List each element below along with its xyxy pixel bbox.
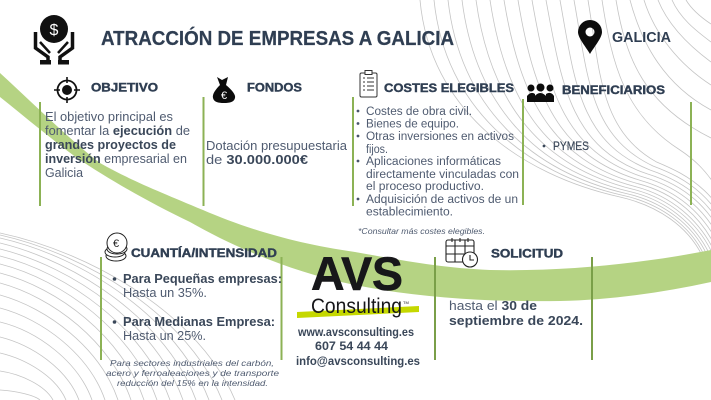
text: objetivo body: Galicia <box>45 165 84 180</box>
icon: map pin <box>578 20 602 54</box>
icon: calendar with clock <box>446 238 478 267</box>
green swoosh band <box>0 73 711 301</box>
panel: solicitud <box>446 238 583 328</box>
text: fondos body: de 30.000.000€ <box>206 152 308 167</box>
contact details: 607 54 44 44 <box>315 341 389 353</box>
text: fondos body <box>206 138 348 167</box>
logo: AVS Consulting: TM <box>403 300 409 305</box>
text: objetivo body <box>45 109 190 180</box>
heading: cuantía/intensidad: CUANTÍA/INTENSIDAD <box>131 247 277 260</box>
panel: fondos <box>206 77 348 167</box>
list: intensidades: Para Pequeñas empresas: <box>123 271 282 286</box>
list: intensidades: Hasta un 25%. <box>123 328 206 343</box>
list: costes: Adquisición de activos de un <box>366 194 518 206</box>
note: sectores: acero y ferroaleaciones y de transporte <box>106 368 279 378</box>
column dividers <box>40 97 691 360</box>
panel: cuantía/intensidad <box>105 233 282 388</box>
text: solicitud body: hasta el 30 de <box>449 298 537 313</box>
panel: costes elegibles <box>357 70 519 236</box>
title: ATRACCIÓN DE EMPRESAS A GALICIA <box>101 26 454 50</box>
list: intensidades: Para Medianas Empresa: <box>123 314 275 329</box>
list: costes: Aplicaciones informáticas <box>366 156 501 168</box>
logo: AVS Consulting: Consulting <box>311 295 402 318</box>
heading: solicitud: SOLICITUD <box>491 248 563 260</box>
list: costes <box>357 106 519 218</box>
icon: people <box>527 84 554 102</box>
list: beneficiarios: PYMES <box>553 139 589 153</box>
icon: coins: € <box>113 238 119 250</box>
panel: objetivo <box>45 77 190 180</box>
panel: beneficiarios <box>527 84 665 153</box>
list: costes: fijos. <box>366 144 388 156</box>
list: costes: el proceso productivo. <box>366 181 484 193</box>
contact details: www.avsconsulting.es <box>297 327 414 339</box>
icon: hands holding coin <box>36 15 72 64</box>
note: sectores: Para sectores industriales del carbón, <box>110 358 274 368</box>
contact details: info@avsconsulting.es <box>296 356 420 368</box>
icon: coins <box>105 233 127 261</box>
list: costes: Otras inversiones en activos <box>366 131 514 143</box>
heading: costes elegibles: COSTES ELEGIBLES <box>384 83 514 95</box>
text: solicitud body: septiembre de 2024. <box>449 313 583 328</box>
heading: objetivo: OBJETIVO <box>91 82 158 94</box>
text: solicitud body <box>449 298 583 328</box>
list: costes: establecimiento. <box>366 206 453 218</box>
icon: money bag: € <box>221 90 227 102</box>
note: sectores: reducción del 15% en la intensidad. <box>117 378 268 388</box>
text: fondos body: Dotación presupuestaria <box>206 138 348 153</box>
icon: hands holding coin: $ <box>50 22 59 39</box>
list: intensidades <box>113 271 282 343</box>
list: costes: Costes de obra civil. <box>366 106 472 118</box>
list: costes: Bienes de equipo. <box>366 118 459 130</box>
list: intensidades: Hasta un 35%. <box>123 285 207 300</box>
heading: fondos: FONDOS <box>247 82 302 94</box>
logo: AVS Consulting <box>297 247 419 318</box>
note: costes: *Consultar más costes elegibles. <box>358 226 485 236</box>
text: objetivo body: fomentar la ejecución de <box>45 123 190 138</box>
icon: target <box>54 77 80 103</box>
contact details <box>296 327 420 368</box>
text: objetivo body: inversión empresarial en <box>45 151 187 166</box>
heading: beneficiarios: BENEFICIARIOS <box>562 85 665 97</box>
text: objetivo body: El objetivo principal es <box>45 109 173 124</box>
text: objetivo body: grandes proyectos de <box>45 137 176 152</box>
icon: money bag <box>213 77 235 103</box>
icon: clipboard <box>360 70 377 97</box>
region label: Galicia: GALICIA <box>612 30 672 46</box>
note: sectores <box>106 358 279 388</box>
logo: AVS Consulting: AVS <box>311 247 403 300</box>
list: costes: directamente vinculadas con <box>366 169 519 181</box>
